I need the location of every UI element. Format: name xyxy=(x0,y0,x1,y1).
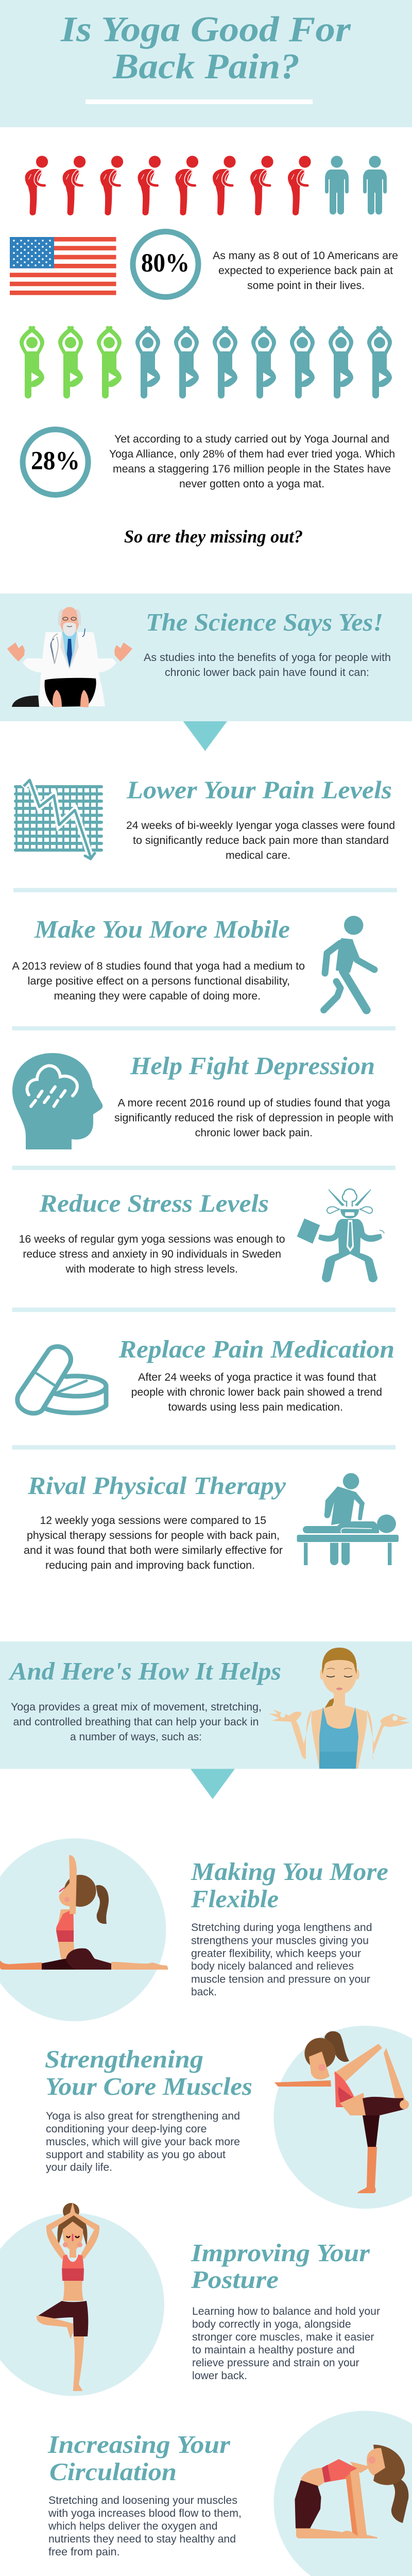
section: lower your pain levels xyxy=(14,776,395,861)
text: medical care. xyxy=(226,850,290,861)
pictogram: 8 of 10 people with back pain xyxy=(25,156,387,215)
text: Stretching and loosening your muscles xyxy=(48,2495,237,2506)
text: Yoga provides a great mix of movement, stretching, xyxy=(11,1701,262,1713)
section: making you more flexible xyxy=(0,1838,388,2021)
icon: falling chart xyxy=(14,780,103,859)
heading: Strengthening xyxy=(45,2045,203,2073)
heading xyxy=(47,2430,231,2486)
text: towards using less pain medication. xyxy=(168,1401,343,1413)
heading: Making You More xyxy=(191,1857,388,1886)
text: significantly reduced the risk of depression in people with xyxy=(114,1112,393,1124)
text: to maintain a healthy posture and xyxy=(192,2344,355,2356)
text: 28% tried yoga: Yoga Alliance, only 28% of them had ever tried yoga. Which xyxy=(109,448,395,460)
section: help fight depression xyxy=(12,1052,393,1149)
text xyxy=(46,2110,240,2174)
text xyxy=(48,2495,242,2558)
heading: Rival Physical Therapy xyxy=(27,1471,286,1500)
heading: Replace Pain Medication xyxy=(118,1335,394,1363)
text xyxy=(19,1233,285,1275)
icon: US flag xyxy=(10,237,116,295)
text xyxy=(191,1922,372,1998)
panel: title header xyxy=(0,0,412,127)
icon: head with rain cloud xyxy=(12,1053,102,1149)
text: chronic lower back pain. xyxy=(195,1127,313,1139)
text: 8 out of 10 Americans xyxy=(213,250,398,292)
stat circle: 28% xyxy=(23,430,88,495)
text: nutrients they need to stay healthy and xyxy=(48,2533,236,2545)
text: 16 weeks of regular gym yoga sessions was enough to xyxy=(19,1233,285,1245)
title xyxy=(60,10,351,87)
heading: Make You More Mobile xyxy=(34,915,290,943)
text: support and stability as you go about xyxy=(46,2149,226,2161)
heading: Your Core Muscles xyxy=(45,2072,252,2100)
text: A 2013 review of 8 studies found that yoga had a medium to xyxy=(12,960,305,972)
heading: Improving Your xyxy=(191,2239,370,2267)
stat circle: 80%: 80% xyxy=(141,249,190,278)
section: rival physical therapy xyxy=(24,1471,399,1571)
icon: stressed businessman xyxy=(297,1189,384,1282)
text: Learning how to balance and hold your xyxy=(192,2306,380,2317)
text: physical therapy sessions for people with back pain, xyxy=(27,1530,280,1541)
icon: walking person xyxy=(324,916,374,1010)
heading xyxy=(191,1857,388,1913)
section: increasing your circulation xyxy=(47,2411,412,2576)
text: muscles, which will give your back more xyxy=(46,2136,240,2148)
heading: Help Fight Depression xyxy=(130,1052,375,1080)
text: to significantly reduce back pain more than standard xyxy=(133,835,389,846)
heading xyxy=(45,2045,252,2100)
text: 8 out of 10 Americans: As many as 8 out of 10 Americans are xyxy=(213,250,398,262)
text: 8 out of 10 Americans: expected to experience back pain at xyxy=(218,265,393,277)
text: 8 out of 10 Americans: some point in their lives. xyxy=(247,280,365,292)
illustration: meditating woman xyxy=(269,1648,410,1769)
section: make you more mobile xyxy=(12,915,374,1010)
text: back. xyxy=(191,1986,217,1998)
text: 28% tried yoga: Yet according to a study carried out by Yoga Journal and xyxy=(114,433,389,445)
text: and it was found that both were similarly effective for xyxy=(24,1545,283,1556)
text: with moderate to high stress levels. xyxy=(65,1263,238,1275)
heading: Reduce Stress Levels xyxy=(39,1189,269,1217)
text: strengthens your muscles giving you xyxy=(191,1935,369,1946)
text xyxy=(12,960,305,1002)
text: 12 weekly yoga sessions were compared to 15 xyxy=(40,1515,266,1527)
text: reducing pain and improving back function. xyxy=(45,1560,255,1571)
section: reduce stress levels xyxy=(19,1189,384,1282)
text: 24 weeks of bi-weekly Iyengar yoga classes were found xyxy=(126,820,395,832)
stat circle: 28%: 28% xyxy=(31,447,80,476)
heading: And Here's How It Helps xyxy=(8,1657,281,1685)
text xyxy=(192,2306,380,2382)
text: body nicely balanced and relieves xyxy=(191,1960,354,1972)
text: A more recent 2016 round up of studies found that yoga xyxy=(118,1097,390,1109)
panel: the science says yes xyxy=(0,594,412,721)
text: body correctly in yoga, alongside xyxy=(192,2318,351,2330)
circle with splits pose xyxy=(0,1838,168,2021)
text xyxy=(114,1097,393,1139)
text: free from pain. xyxy=(48,2546,120,2558)
text: relieve pressure and strain on your xyxy=(192,2357,359,2369)
stat circle: 80% xyxy=(133,232,198,297)
text: 28% tried yoga: never gotten onto a yoga mat. xyxy=(179,478,324,490)
circle with camel pose xyxy=(273,2411,412,2576)
heading: so are they missing out: So are they missing out? xyxy=(124,527,303,547)
heading: Lower Your Pain Levels xyxy=(126,776,392,804)
text: 28% tried yoga: means a staggering 176 million people in the States have xyxy=(113,463,391,475)
heading: the science says yes: The Science Says Yes! xyxy=(146,608,383,636)
section: replace pain medication xyxy=(18,1335,394,1413)
heading: Flexible xyxy=(191,1885,279,1913)
text: a number of ways, such as: xyxy=(70,1731,202,1743)
text: lower back. xyxy=(192,2370,247,2382)
text: studies intro xyxy=(144,652,391,679)
text: Yoga is also great for strengthening and xyxy=(46,2110,240,2122)
text: Stretching during yoga lengthens and xyxy=(191,1922,372,1934)
text: meaning they were capable of doing more. xyxy=(54,990,261,1002)
text: with yoga increases blood flow to them, xyxy=(48,2507,242,2519)
text: studies intro: chronic lower back pain have found it can: xyxy=(165,667,369,679)
title: Is Yoga Good For xyxy=(60,10,351,49)
text: stronger core muscles, make it easier xyxy=(192,2331,374,2343)
heading: Posture xyxy=(191,2265,279,2294)
text: and controlled breathing that can help your back in xyxy=(13,1716,259,1728)
text xyxy=(11,1701,262,1743)
heading: Increasing Your xyxy=(47,2430,231,2459)
pictogram: 3 of 10 people doing yoga xyxy=(20,326,392,399)
text: After 24 weeks of yoga practice it was found that xyxy=(138,1371,376,1383)
heading xyxy=(191,2239,370,2294)
icon: physical therapist and patient xyxy=(297,1473,399,1565)
section: improving your posture xyxy=(0,2202,380,2396)
text xyxy=(131,1371,382,1413)
text: large positive effect on a persons functional disability, xyxy=(28,975,290,987)
arrow: down triangle xyxy=(183,721,227,751)
panel: and here's how it helps xyxy=(0,1641,412,1769)
text: people with chronic lower back pain showed a trend xyxy=(131,1386,382,1398)
arrow: down triangle xyxy=(191,1769,235,1799)
text: greater flexibility, which keeps your xyxy=(191,1947,361,1960)
heading: Circulation xyxy=(49,2458,177,2486)
text: reduce stress and anxiety in 90 individuals in Sweden xyxy=(23,1248,281,1260)
text: which helps deliver the oxygen and xyxy=(48,2520,217,2532)
text xyxy=(126,820,395,861)
illustration: meditating doctor xyxy=(7,607,132,707)
circle with dancer pose xyxy=(273,2026,412,2209)
text: muscle tension and pressure on your xyxy=(191,1973,370,1985)
text: conditioning your deep-lying core xyxy=(46,2123,207,2135)
text: studies intro: As studies into the benefits of yoga for people with xyxy=(144,652,391,664)
circle with tree pose xyxy=(0,2202,164,2396)
title: Back Pain? xyxy=(112,47,300,87)
section: strengthening your core muscles xyxy=(45,2026,412,2209)
text: your daily life. xyxy=(46,2162,112,2174)
text: 28% tried yoga xyxy=(109,433,395,490)
icon: pill and tablet xyxy=(18,1347,106,1413)
text xyxy=(24,1515,283,1571)
